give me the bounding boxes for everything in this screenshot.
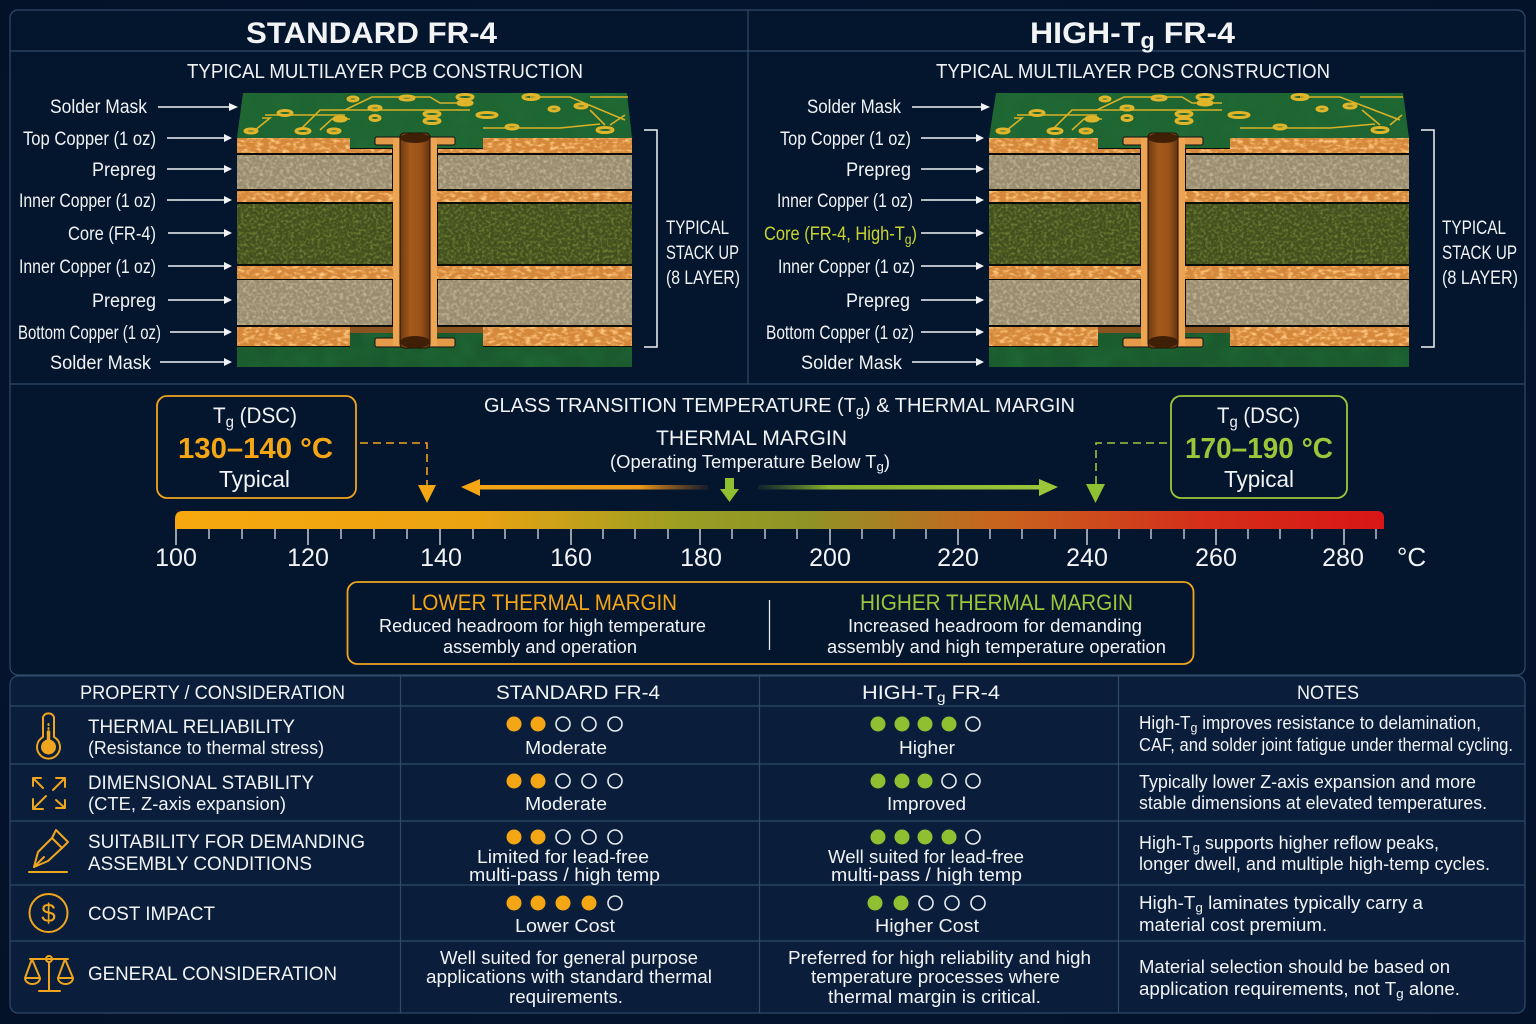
row: dimensional stability: DIMENSIONAL STABILITY [88, 772, 314, 794]
row: general consideration [25, 948, 1460, 1007]
row: thermal reliability: Moderate [525, 738, 607, 758]
stack up label right: STACK UP [1442, 243, 1517, 264]
callout: standard Tg value: g [226, 414, 234, 431]
callout: thermal margin comparison: assembly and high temperature operation [827, 636, 1166, 657]
row: dimensional stability: Typically lower Z-axis expansion and more [1139, 772, 1476, 792]
layer labels: high-Tg FR-4: Inner Copper (1 oz) [778, 257, 915, 278]
row: suitability for demanding assembly: longer dwell, and multiple high-temp cycles. [1139, 854, 1490, 874]
icon: dollar coin: $ [41, 898, 56, 928]
row: thermal reliability: High-T [1139, 713, 1193, 733]
arrows: high-Tg layers [912, 103, 990, 366]
row: thermal reliability: Higher [899, 738, 955, 758]
row: cost impact: g [1195, 900, 1203, 915]
row: suitability for demanding assembly [29, 830, 1490, 885]
table header: HIGH-T [862, 682, 929, 704]
chart: temperature scale: 200 [809, 544, 851, 572]
table header: PROPERTY / CONSIDERATION [80, 682, 345, 704]
row: general consideration: Preferred for high reliability and high [788, 948, 1091, 968]
callout: thermal margin comparison: LOWER THERMAL MARGIN [411, 590, 677, 615]
callout: high Tg value: g [1229, 414, 1238, 431]
table header [80, 682, 1359, 705]
heading: high-Tg FR-4: HIGH-T [1030, 17, 1133, 50]
chart: temperature scale: 280 [1322, 544, 1364, 572]
layer labels: high-Tg FR-4: Inner Copper (1 oz) [777, 191, 913, 212]
callout: high Tg value: T [1217, 403, 1230, 428]
layer labels: standard FR-4: Top Copper (1 oz) [23, 129, 156, 150]
layer labels: high-Tg FR-4: Prepreg [846, 291, 910, 312]
row: general consideration: GENERAL CONSIDERATION [88, 963, 337, 985]
layer labels: standard FR-4: Inner Copper (1 oz) [19, 257, 156, 278]
icon: soldering tool [29, 830, 68, 872]
chart: temperature scale [155, 511, 1426, 572]
row: suitability for demanding assembly: g [1193, 840, 1200, 855]
stack up label right [1442, 218, 1518, 289]
layer labels: high-Tg FR-4: Core (FR-4, High-T [764, 224, 927, 245]
chart: temperature scale: 160 [550, 544, 592, 572]
table header: FR-4 [946, 682, 1000, 704]
callout: thermal margin comparison: Reduced headroom for high temperature [379, 615, 706, 636]
row: cost impact: material cost premium. [1139, 915, 1327, 935]
callout: high Tg value: 170–190 °C [1185, 433, 1333, 465]
arrow: operating temperature marker [720, 478, 739, 502]
layer labels: high-Tg FR-4: g [905, 231, 912, 247]
chart: temperature scale: 220 [937, 544, 979, 572]
row: cost impact: laminates typically carry a [1203, 893, 1424, 913]
callout: standard Tg value: 130–140 °C [178, 433, 333, 465]
row: thermal reliability: CAF, and solder joint fatigue under thermal cycling. [1139, 735, 1513, 755]
layer labels: standard FR-4: Core (FR-4) [68, 224, 156, 245]
icon: thermometer [37, 713, 60, 759]
row: thermal reliability: (Resistance to thermal stress) [88, 738, 324, 758]
subheading: operating temperature: ) [884, 452, 890, 472]
row: cost impact [30, 893, 1424, 936]
chart: temperature scale: 100 [155, 544, 197, 572]
subheading: operating temperature: (Operating Temperature Below T [610, 452, 870, 472]
row: general consideration: requirements. [509, 987, 623, 1007]
heading: glass transition: ) & THERMAL MARGIN [864, 394, 1075, 417]
table header: g [937, 689, 946, 705]
row: general consideration: thermal margin is critical. [828, 987, 1041, 1007]
callout: standard Tg value [157, 396, 356, 498]
heading: glass transition: g [856, 403, 864, 420]
row: suitability for demanding assembly: High-T [1139, 833, 1193, 853]
chart: temperature scale: °C [1397, 542, 1426, 572]
table header: NOTES [1297, 682, 1359, 704]
row: general consideration: application requirements, not T [1139, 979, 1386, 999]
dashed pointer: high Tg [1086, 443, 1167, 503]
panel: comparison table [10, 676, 1525, 1013]
row: dimensional stability [33, 772, 1487, 814]
table header: STANDARD FR-4 [496, 682, 660, 704]
row: general consideration: Well suited for general purpose [440, 948, 698, 968]
row: suitability for demanding assembly: multi-pass / high temp [469, 865, 660, 885]
layer labels: high-Tg FR-4: ) [912, 224, 917, 245]
bracket: left stack up [644, 130, 657, 347]
stack up label left [666, 218, 740, 289]
row: general consideration: Material selection should be based on [1139, 957, 1450, 977]
callout: high Tg value: (DSC) [1238, 403, 1300, 428]
row: thermal reliability [37, 713, 1513, 759]
heading: thermal margin: THERMAL MARGIN [656, 427, 847, 450]
layer labels: high-Tg FR-4: Top Copper (1 oz) [780, 129, 911, 150]
callout: thermal margin comparison: assembly and operation [443, 636, 637, 657]
chart: temperature scale: 140 [420, 544, 462, 572]
subheading right: TYPICAL MULTILAYER PCB CONSTRUCTION [936, 61, 1330, 83]
row: thermal reliability: THERMAL RELIABILITY [88, 716, 295, 738]
stack up label left: TYPICAL [666, 218, 729, 239]
layer labels: standard FR-4 [18, 97, 161, 374]
row: general consideration: temperature processes where [811, 967, 1060, 987]
row: suitability for demanding assembly: SUITABILITY FOR DEMANDING [88, 831, 365, 853]
dashed pointer: standard Tg [360, 443, 436, 503]
layer labels: high-Tg FR-4: Bottom Copper (1 oz) [766, 323, 914, 344]
row: dimensional stability: stable dimensions at elevated temperatures. [1139, 793, 1487, 813]
callout: thermal margin comparison: Increased headroom for demanding [848, 615, 1142, 636]
row: dimensional stability: Improved [887, 794, 966, 814]
callout: standard Tg value: T [213, 403, 226, 428]
icon: balance scales [25, 956, 73, 991]
callout: high Tg value [1171, 396, 1347, 498]
subheading left: TYPICAL MULTILAYER PCB CONSTRUCTION [187, 61, 583, 83]
icon: expansion arrows [33, 778, 65, 809]
row: cost impact: Lower Cost [515, 916, 615, 936]
row: thermal reliability: improves resistance to delamination, [1197, 713, 1481, 733]
callout: standard Tg value: Typical [219, 466, 290, 492]
layer labels: standard FR-4: Prepreg [92, 291, 156, 312]
heading: high-Tg FR-4: FR-4 [1155, 17, 1235, 50]
subheading: operating temperature: g [876, 459, 884, 474]
icon: dollar coin [30, 894, 68, 932]
callout: thermal margin comparison: HIGHER THERMAL MARGIN [860, 590, 1133, 615]
row: cost impact: Higher Cost [875, 916, 979, 936]
row: suitability for demanding assembly: Limited for lead-free [477, 847, 649, 867]
row: dimensional stability: (CTE, Z-axis expansion) [88, 794, 286, 814]
callout: thermal margin comparison [348, 582, 1194, 664]
layer labels: high-Tg FR-4: Solder Mask [801, 353, 902, 374]
stack up label left: (8 LAYER) [666, 268, 740, 289]
row: cost impact: High-T [1139, 893, 1193, 913]
layer labels: high-Tg FR-4 [764, 97, 917, 374]
chart: temperature scale: 120 [287, 544, 329, 572]
arrow: higher margin [758, 479, 1058, 496]
layer labels: standard FR-4: Solder Mask [50, 353, 151, 374]
diagram: standard PCB cross-section [237, 93, 632, 367]
layer labels: standard FR-4: Bottom Copper (1 oz) [18, 323, 161, 344]
heading: standard FR-4: STANDARD FR-4 [246, 17, 497, 50]
bracket: right stack up [1421, 130, 1434, 347]
row: dimensional stability: Moderate [525, 794, 607, 814]
arrow: lower margin [461, 479, 708, 496]
row: suitability for demanding assembly: supports higher reflow peaks, [1200, 833, 1439, 853]
layer labels: standard FR-4: Inner Copper (1 oz) [19, 191, 156, 212]
row: general consideration: alone. [1404, 979, 1460, 999]
panel: comparison and thermal scale [10, 10, 1525, 675]
row: suitability for demanding assembly: Well suited for lead-free [828, 847, 1024, 867]
heading: high-Tg FR-4: g [1140, 28, 1155, 53]
layer labels: high-Tg FR-4: Prepreg [846, 160, 911, 181]
chart: temperature scale: 180 [680, 544, 722, 572]
row: general consideration: g [1396, 986, 1404, 1001]
row: thermal reliability: g [1191, 720, 1197, 735]
stack up label right: (8 LAYER) [1442, 268, 1518, 289]
callout: standard Tg value: (DSC) [234, 403, 297, 428]
row: suitability for demanding assembly: ASSEMBLY CONDITIONS [88, 853, 312, 875]
row: general consideration: applications with standard thermal [426, 967, 712, 987]
stack up label left: STACK UP [666, 243, 739, 264]
arrows: standard FR-4 layers [158, 103, 238, 366]
layer labels: standard FR-4: Solder Mask [50, 97, 147, 118]
chart: temperature scale: 240 [1066, 544, 1108, 572]
stack up label right: TYPICAL [1442, 218, 1506, 239]
row: suitability for demanding assembly: multi-pass / high temp [831, 865, 1022, 885]
layer labels: high-Tg FR-4: Solder Mask [807, 97, 901, 118]
chart: temperature scale: 260 [1195, 544, 1237, 572]
heading: glass transition: GLASS TRANSITION TEMPERATURE (T [484, 394, 866, 417]
diagram: high-Tg PCB cross-section [989, 93, 1409, 367]
callout: high Tg value: Typical [1224, 466, 1294, 492]
row: cost impact: COST IMPACT [88, 903, 215, 925]
layer labels: standard FR-4: Prepreg [92, 160, 156, 181]
